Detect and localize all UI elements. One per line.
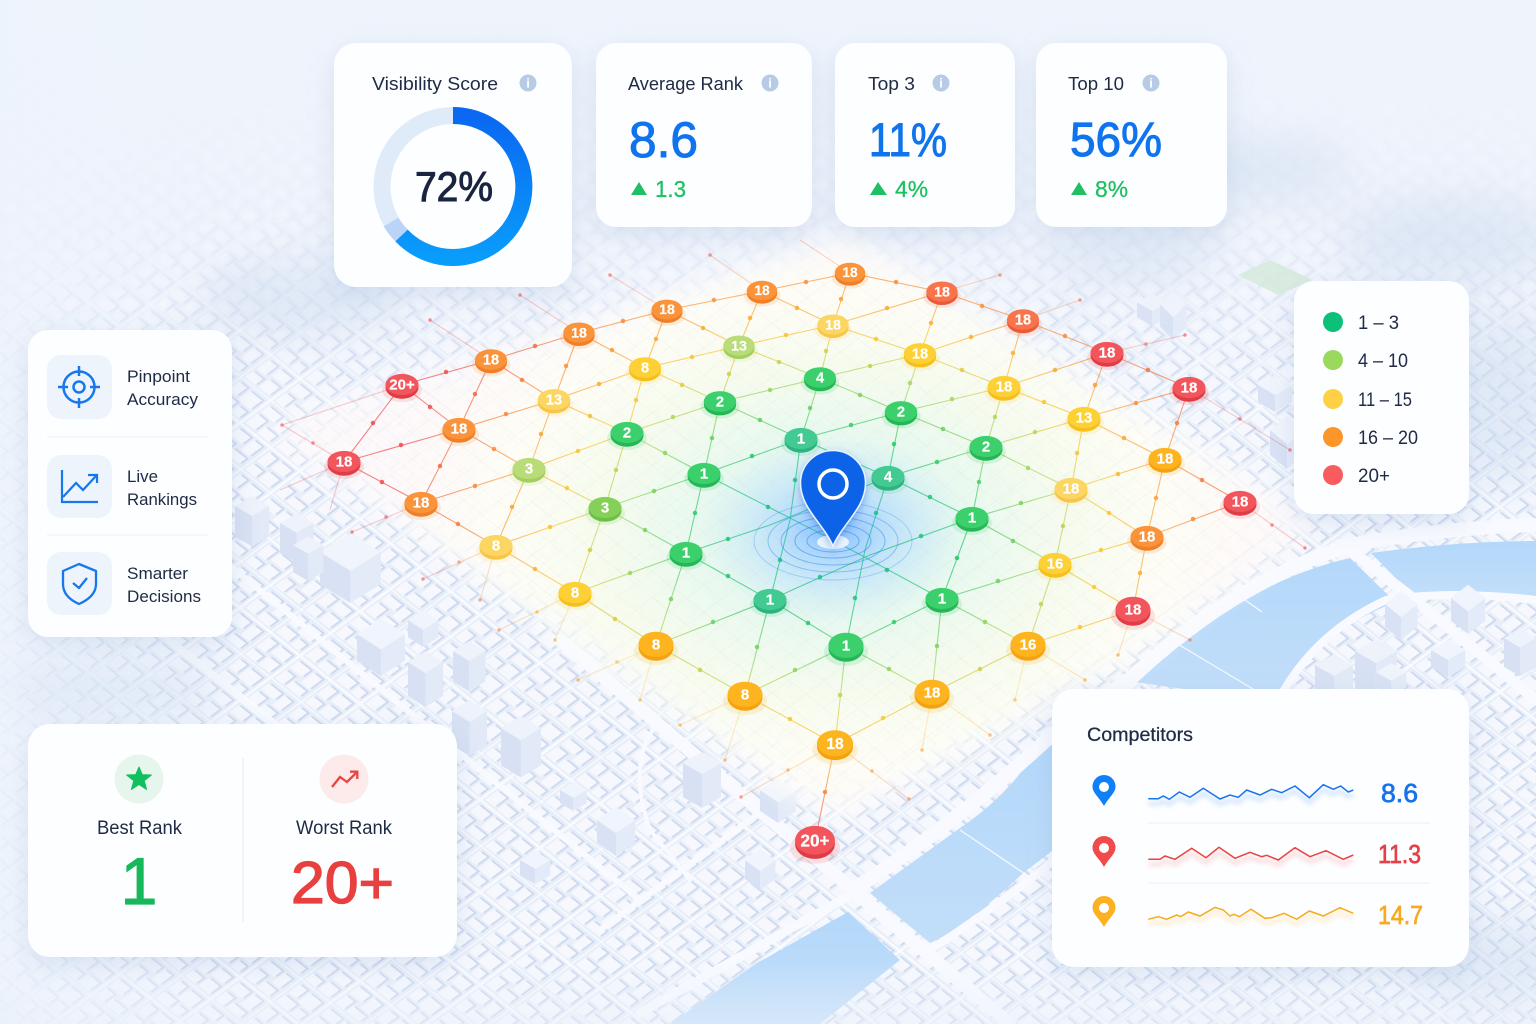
icon: info — [520, 74, 536, 92]
marker 8: 8 — [571, 584, 579, 602]
marker 18: 18 — [1181, 380, 1197, 396]
icon: info: i — [526, 76, 530, 90]
text: live rankings: Rankings — [127, 490, 197, 509]
heading: Average Rank — [628, 73, 744, 94]
marker 2: 2 — [623, 424, 631, 442]
heading: Top 3 — [868, 73, 915, 94]
delta: 1.3 — [655, 176, 686, 202]
marker 16: 16 — [1047, 556, 1063, 572]
marker 16 — [1006, 632, 1050, 665]
marker 2 — [966, 436, 1006, 464]
legend 11-15 — [1323, 389, 1412, 411]
marker 8: 8 — [652, 636, 660, 654]
icon: line chart — [47, 455, 112, 518]
marker 18 — [401, 492, 441, 520]
marker 20+: 20+ — [801, 832, 830, 851]
marker 1 — [666, 542, 706, 570]
marker 8 — [626, 357, 664, 384]
icon: info — [932, 74, 950, 92]
panel: features — [28, 330, 232, 637]
marker 18: 18 — [571, 325, 587, 341]
icon: info: i — [939, 76, 943, 90]
marker 1: 1 — [938, 590, 946, 608]
marker 2 — [607, 422, 647, 450]
delta: 8% — [1095, 176, 1128, 202]
location rings — [754, 502, 912, 580]
marker 18: 18 — [754, 283, 770, 298]
marker 1 — [781, 428, 821, 456]
marker 18 — [814, 314, 852, 341]
marker 18 — [1004, 309, 1042, 336]
marker 20+ — [382, 374, 422, 402]
marker 1: 1 — [700, 466, 708, 482]
marker 13: 13 — [731, 338, 747, 354]
card background — [28, 330, 232, 637]
card background — [1036, 43, 1227, 227]
marker 1 — [922, 588, 962, 616]
marker 2: 2 — [716, 394, 724, 410]
marker 8 — [723, 682, 767, 715]
legend 4-10: 4 – 10 — [1358, 351, 1408, 372]
marker 3: 3 — [601, 500, 609, 516]
text: live rankings — [127, 467, 197, 509]
grid heat tint — [275, 240, 1315, 815]
marker 13 — [720, 335, 758, 362]
marker 1 — [824, 633, 868, 666]
marker 18 — [812, 730, 858, 765]
marker 18 — [1087, 342, 1127, 370]
worst rank label: Worst Rank — [296, 818, 392, 839]
marker 18: 18 — [996, 378, 1012, 396]
marker 18: 18 — [336, 454, 352, 470]
marker 8: 8 — [741, 686, 749, 704]
marker 16 — [1035, 553, 1075, 581]
panel: top 10 — [1036, 43, 1227, 227]
icon: star — [114, 754, 164, 804]
marker 18: 18 — [451, 420, 467, 438]
marker 13: 13 — [1076, 410, 1092, 426]
marker 4: 4 — [884, 468, 893, 486]
competitor row blue: 8.6 — [1381, 780, 1418, 808]
rank grid dots — [373, 282, 1202, 792]
park patch — [1238, 260, 1313, 295]
legend 20+: 20+ — [1358, 466, 1390, 487]
central location pin — [800, 450, 866, 546]
marker 2 — [881, 401, 921, 429]
card background — [334, 43, 572, 287]
delta — [870, 176, 928, 202]
competitor row blue — [1092, 775, 1418, 808]
marker 18: 18 — [842, 265, 858, 280]
marker 18 — [324, 451, 364, 479]
legend 11-15: 11 – 15 — [1358, 390, 1412, 411]
isometric buildings — [235, 291, 1536, 890]
marker 13 — [1064, 407, 1104, 435]
best rank value: 1 — [121, 844, 157, 918]
marker 18 — [832, 263, 868, 289]
icon: target — [47, 355, 112, 419]
water: rivers — [670, 541, 1536, 1024]
marker 4 — [868, 466, 908, 494]
marker 18: 18 — [1139, 528, 1155, 546]
marker 4: 4 — [816, 370, 825, 386]
marker 18: 18 — [659, 301, 675, 317]
marker 18 — [1145, 448, 1185, 476]
icon: info: i — [768, 76, 772, 90]
competitor row yellow — [1092, 896, 1423, 930]
competitor row red: 11.3 — [1378, 841, 1421, 869]
marker 8: 8 — [641, 360, 649, 376]
marker 1: 1 — [766, 592, 774, 608]
panel: legend — [1294, 281, 1469, 514]
marker 8: 8 — [492, 538, 500, 554]
legend 1-3: 1 – 3 — [1358, 313, 1399, 334]
marker 18: 18 — [1063, 480, 1079, 498]
marker 1: 1 — [842, 638, 850, 654]
marker 18: 18 — [912, 346, 928, 362]
text: pinpoint accuracy — [127, 367, 198, 409]
marker 8 — [476, 535, 516, 563]
panel: top 3 — [835, 43, 1015, 227]
marker 18 — [472, 349, 510, 376]
legend 20+ — [1323, 465, 1390, 487]
marker 2: 2 — [897, 404, 905, 420]
marker 13: 13 — [546, 392, 562, 408]
legend 4-10 — [1323, 350, 1408, 372]
marker 18 — [1169, 377, 1209, 405]
marker 18: 18 — [1015, 312, 1031, 328]
marker 18 — [744, 281, 780, 307]
marker 1: 1 — [797, 430, 805, 448]
marker 18 — [1220, 491, 1260, 519]
marker 1 — [750, 589, 790, 617]
best rank label: Best Rank — [97, 818, 182, 839]
delta — [1071, 176, 1128, 202]
legend 16-20: 16 – 20 — [1358, 428, 1418, 449]
donut chart — [382, 116, 524, 258]
competitor row red — [1092, 836, 1421, 869]
marker 18: 18 — [825, 317, 841, 333]
marker 18: 18 — [1125, 602, 1141, 618]
marker 18: 18 — [924, 684, 940, 702]
card background — [835, 43, 1015, 227]
marker 18 — [923, 281, 961, 308]
marker 18: 18 — [826, 736, 844, 753]
text: live rankings: Live — [127, 467, 158, 486]
marker 18: 18 — [1232, 494, 1248, 510]
marker 8 — [555, 582, 595, 610]
rank grid lines — [280, 240, 1305, 841]
heading: Visibility Score — [372, 73, 498, 94]
marker 18: 18 — [413, 494, 429, 512]
text: pinpoint accuracy: Pinpoint — [127, 367, 190, 386]
icon: info — [762, 74, 778, 92]
worst rank value: 20+ — [291, 850, 394, 916]
value: 8.6 — [629, 112, 698, 168]
marker 18: 18 — [1099, 344, 1115, 362]
panel: competitors — [1052, 689, 1469, 967]
card background — [1052, 689, 1469, 967]
marker 18: 18 — [934, 284, 950, 300]
marker 13 — [534, 389, 574, 417]
value: 11% — [869, 113, 947, 166]
bridge cables — [960, 595, 1262, 874]
panel: average rank — [596, 43, 812, 227]
panel: visibility score — [334, 43, 572, 287]
delta — [631, 176, 686, 202]
marker 2 — [700, 391, 740, 419]
text: smarter decisions: Smarter — [127, 564, 188, 583]
score value: 72% — [415, 163, 493, 210]
text: smarter decisions: Decisions — [127, 587, 201, 606]
text: smarter decisions — [127, 564, 201, 606]
icon: info: i — [1149, 76, 1153, 90]
icon: shield — [47, 552, 112, 615]
marker 18: 18 — [1157, 450, 1173, 468]
heading: Competitors — [1087, 725, 1193, 746]
marker 3 — [509, 458, 549, 486]
marker 18 — [560, 322, 598, 349]
marker 18 — [648, 300, 686, 326]
marker 3: 3 — [525, 460, 533, 478]
marker 18 — [984, 376, 1024, 404]
marker 4 — [801, 367, 839, 394]
marker 18 — [910, 680, 954, 713]
marker 1 — [952, 507, 992, 535]
roads and embankments — [100, 460, 1536, 1024]
marker 1: 1 — [682, 544, 690, 562]
marker 20+: 20+ — [389, 376, 415, 394]
icon: info — [1142, 74, 1160, 92]
marker 18 — [1127, 526, 1167, 554]
heading: Top 10 — [1068, 73, 1124, 94]
marker 18 — [1051, 478, 1091, 506]
panel: best and worst rank — [28, 724, 457, 957]
card background — [596, 43, 812, 227]
marker 20+ — [790, 826, 840, 864]
competitor row yellow: 14.7 — [1378, 902, 1423, 930]
marker 2: 2 — [982, 438, 990, 456]
delta: 4% — [895, 176, 928, 202]
marker 18 — [439, 418, 479, 446]
outer grid dots — [282, 255, 1305, 799]
marker 8 — [634, 632, 678, 665]
marker 3 — [585, 497, 625, 525]
legend 16-20 — [1323, 427, 1418, 449]
icon: trend — [320, 754, 368, 804]
legend 1-3 — [1323, 312, 1399, 334]
text: pinpoint accuracy: Accuracy — [127, 390, 198, 409]
marker 1 — [684, 463, 724, 491]
marker 16: 16 — [1020, 636, 1036, 654]
marker 18 — [1111, 597, 1155, 630]
rank markers — [324, 263, 1260, 864]
card background — [28, 724, 457, 957]
card background — [1294, 281, 1469, 514]
marker 18 — [900, 343, 940, 371]
marker 1: 1 — [968, 510, 976, 526]
marker 18: 18 — [483, 352, 499, 368]
value: 56% — [1070, 114, 1162, 167]
